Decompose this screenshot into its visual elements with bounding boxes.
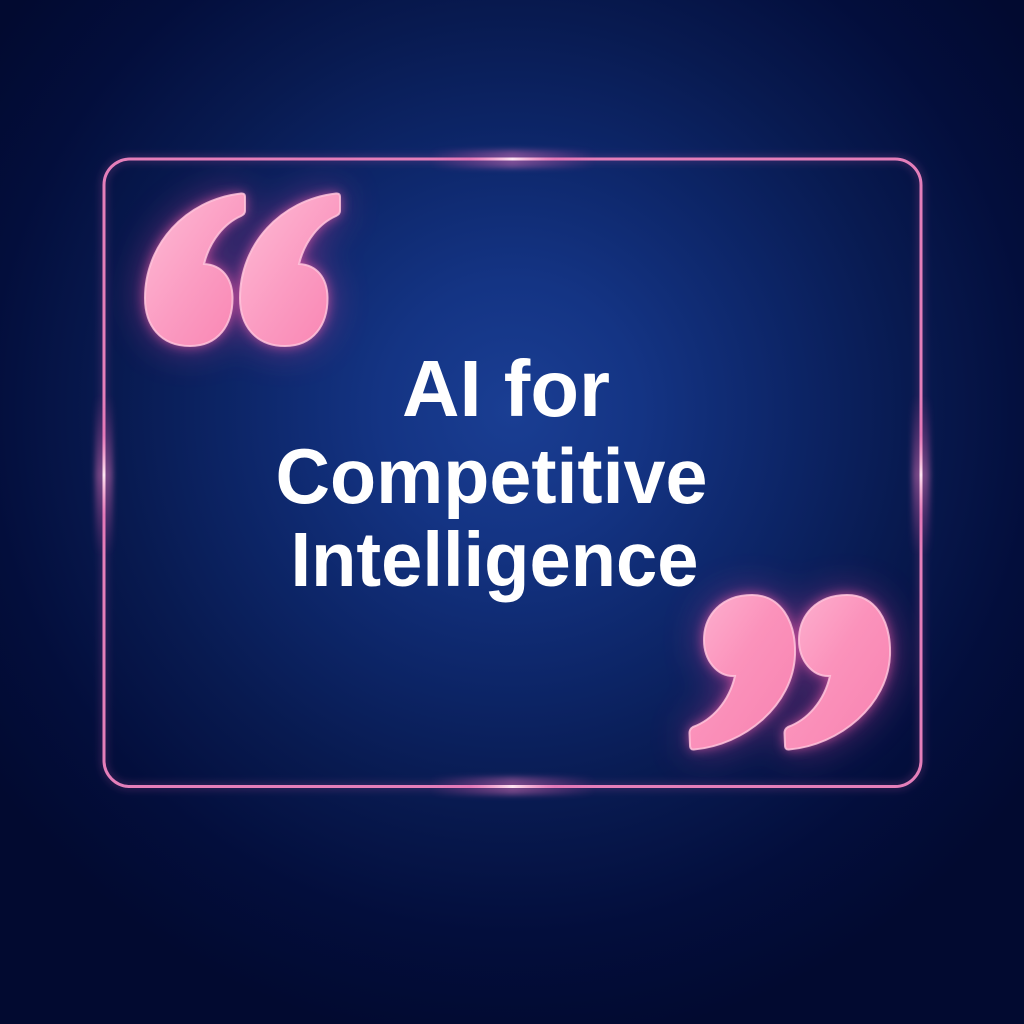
title: Intelligence bbox=[290, 517, 698, 603]
icon: opening quotation mark bbox=[145, 193, 340, 346]
panel: glowing frame bbox=[95, 150, 930, 795]
title bbox=[276, 344, 708, 603]
title: AI for bbox=[402, 344, 610, 433]
icon: closing quotation mark bbox=[690, 595, 890, 750]
title: Competitive bbox=[276, 432, 708, 520]
